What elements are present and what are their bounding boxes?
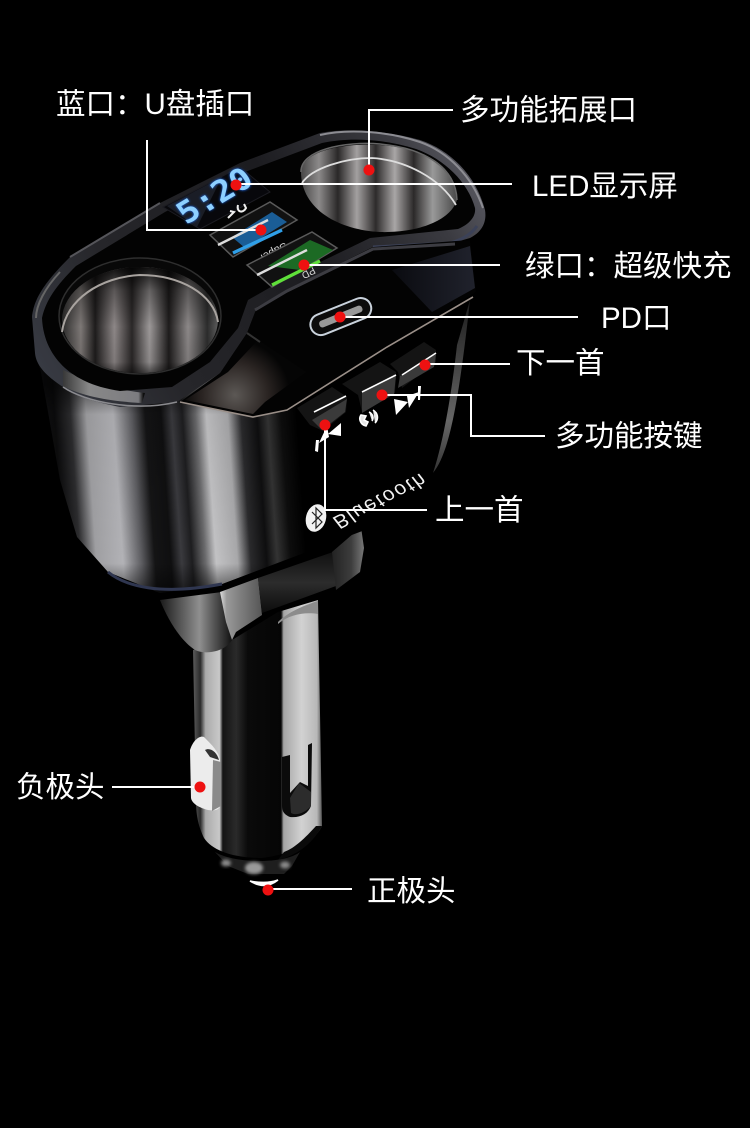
- blue USB port: [210, 202, 297, 257]
- negative side contact: [190, 737, 221, 811]
- marker: [256, 224, 266, 236]
- marker: [320, 420, 330, 430]
- label: 上一首: [435, 494, 524, 527]
- marker: [420, 360, 430, 370]
- LED display: 5:20: [169, 160, 260, 231]
- top plate: [32, 130, 485, 407]
- LED display: 5:20: [169, 160, 260, 231]
- leader line: [268, 888, 352, 890]
- plug tip: [215, 852, 300, 885]
- icon: previous track: [315, 423, 341, 452]
- label: 正极头: [367, 875, 456, 908]
- callout: 负极头: [16, 771, 206, 804]
- label: 蓝口：U盘插口: [56, 88, 254, 121]
- multi-function button: [342, 362, 396, 413]
- label: 多功能按键: [555, 420, 703, 453]
- callout: 上一首: [320, 420, 524, 527]
- label: 下一首: [516, 347, 605, 380]
- icon: next track: [394, 386, 421, 415]
- Super label: Super: [257, 239, 289, 264]
- marker: [364, 164, 374, 176]
- neck: [160, 592, 232, 652]
- marker: [376, 390, 388, 400]
- leader line: [236, 183, 512, 185]
- marker: [298, 260, 310, 270]
- callout: 绿口 超级快充: [298, 250, 732, 283]
- callout: LED显示屏: [230, 170, 678, 203]
- leader line: [340, 316, 578, 318]
- leader line: [382, 395, 545, 436]
- previous button: [297, 387, 347, 431]
- marker: [262, 884, 274, 896]
- callout: PD口: [334, 302, 671, 335]
- label: 负极头: [16, 771, 105, 804]
- hinge silver: [220, 578, 262, 640]
- hinge cap: [332, 527, 364, 590]
- icon: Bluetooth badge: [303, 502, 329, 534]
- leader line: [425, 363, 510, 365]
- callout: 蓝口 U盘插口: [56, 88, 266, 236]
- marker: [230, 180, 242, 190]
- USB-C port: [307, 295, 374, 338]
- marker: [334, 312, 346, 322]
- PD label: PD: [299, 264, 317, 280]
- next button: [390, 342, 436, 388]
- marker: [194, 782, 206, 792]
- Bluetooth wordmark: Bluetooth: [330, 468, 429, 533]
- green USB port: [247, 232, 337, 287]
- label: 多功能拓展口: [460, 94, 637, 127]
- lower deck under plate: [180, 240, 476, 417]
- label: LED显示屏: [532, 170, 678, 203]
- label: 绿口：超级快充: [525, 250, 732, 283]
- leader line: [304, 264, 500, 266]
- leader line: [112, 786, 200, 788]
- leader line: [325, 425, 427, 510]
- label: PD口: [601, 302, 671, 335]
- icon: phone call: [360, 410, 377, 426]
- plug barrel: [193, 600, 322, 860]
- left socket: [59, 258, 221, 375]
- leader line: [369, 110, 453, 170]
- callout: 正极头: [262, 875, 456, 908]
- right socket: [300, 140, 460, 235]
- leader line: [147, 140, 261, 230]
- callout: 多功能按键: [376, 390, 703, 453]
- callout: 多功能拓展口: [364, 94, 637, 176]
- main body: [35, 260, 477, 593]
- product illustration: car charger: [32, 130, 485, 885]
- hinge arm: [258, 552, 336, 613]
- callout: 下一首: [420, 347, 605, 380]
